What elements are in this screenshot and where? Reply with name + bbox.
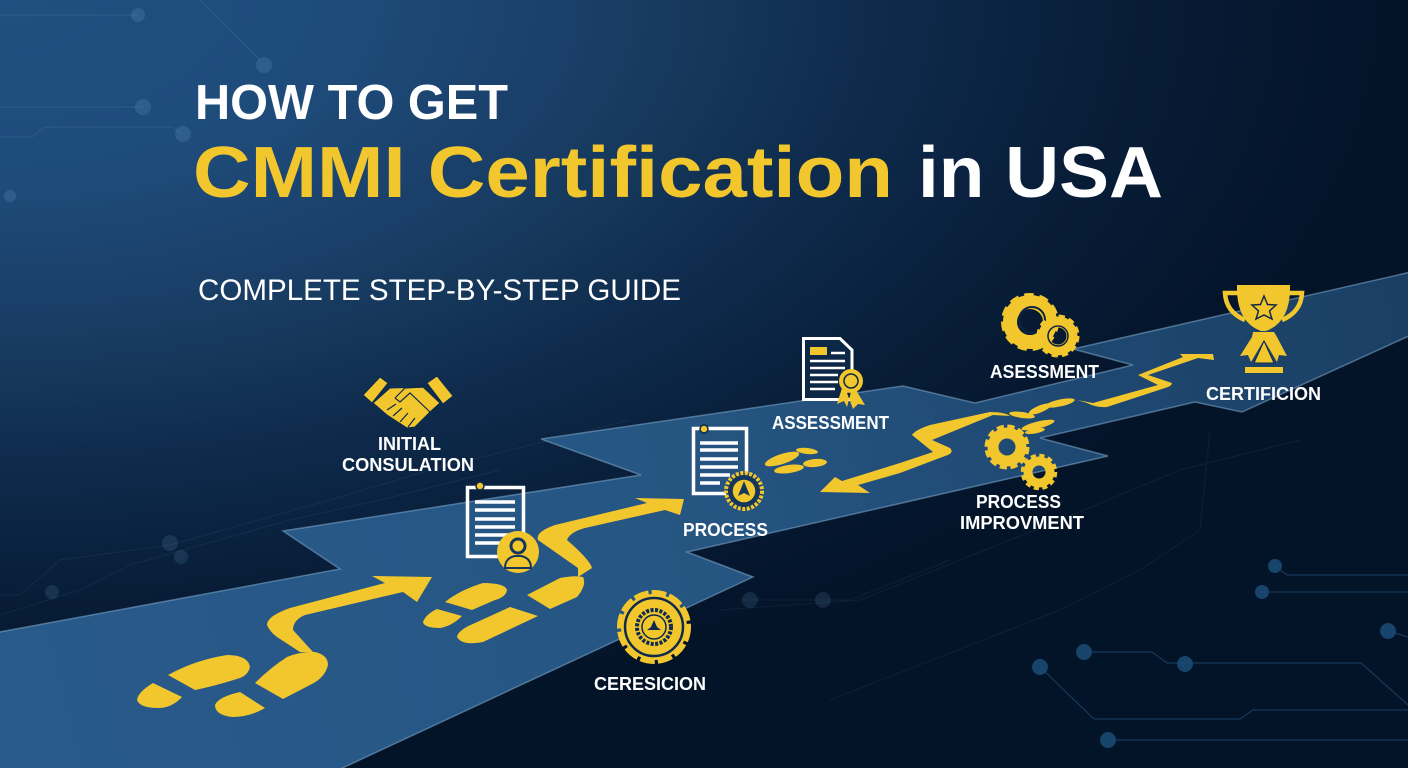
icon: round seal [621,594,687,660]
arrow 4 [1077,354,1214,407]
heading line: CMMI Certification in USA: CMMI Certification [193,133,893,213]
heading line: how to get: HOW TO GET [195,76,508,130]
label: assessment: ASSESSMENT [772,413,889,433]
small footprints [763,447,827,475]
arrow 1 [267,576,432,652]
heading line: CMMI Certification in USA [193,133,1163,213]
label: asessment: ASESSMENT [990,362,1099,382]
icon: document with person badge [468,482,539,573]
arrow 2 [538,498,684,577]
twisted footprints [1009,396,1075,435]
icon: certificate document [804,338,865,409]
label: initial: INITIAL [378,434,441,454]
step: assessment document [772,338,889,433]
label: consulation: CONSULATION [342,455,474,475]
label: ceresicion: CERESICION [594,674,706,694]
subtitle: COMPLETE STEP-BY-STEP GUIDE [198,274,681,307]
step: ceresicion [594,594,706,694]
arrow 3 [820,412,1010,493]
label: process: PROCESS [976,492,1061,512]
icon: trophy [1225,285,1302,373]
heading line: CMMI Certification in USA: in USA [918,133,1163,213]
label: process: PROCESS [683,520,768,540]
icon: document with seal [694,425,762,509]
second footprints [423,576,584,643]
icon: process gears [987,427,1055,488]
title [193,76,1163,213]
step: process [683,425,768,540]
step: certification [1206,285,1321,404]
icon: handshake [363,376,453,428]
road path [0,272,1408,768]
step: process improvement [960,427,1084,533]
label: certificion: CERTIFICION [1206,384,1321,404]
first footprints [137,652,328,717]
icon: gears [1004,296,1077,355]
step: asessment gears [990,296,1099,382]
step: initial consultation [342,376,474,475]
label: improvment: IMPROVMENT [960,513,1084,533]
